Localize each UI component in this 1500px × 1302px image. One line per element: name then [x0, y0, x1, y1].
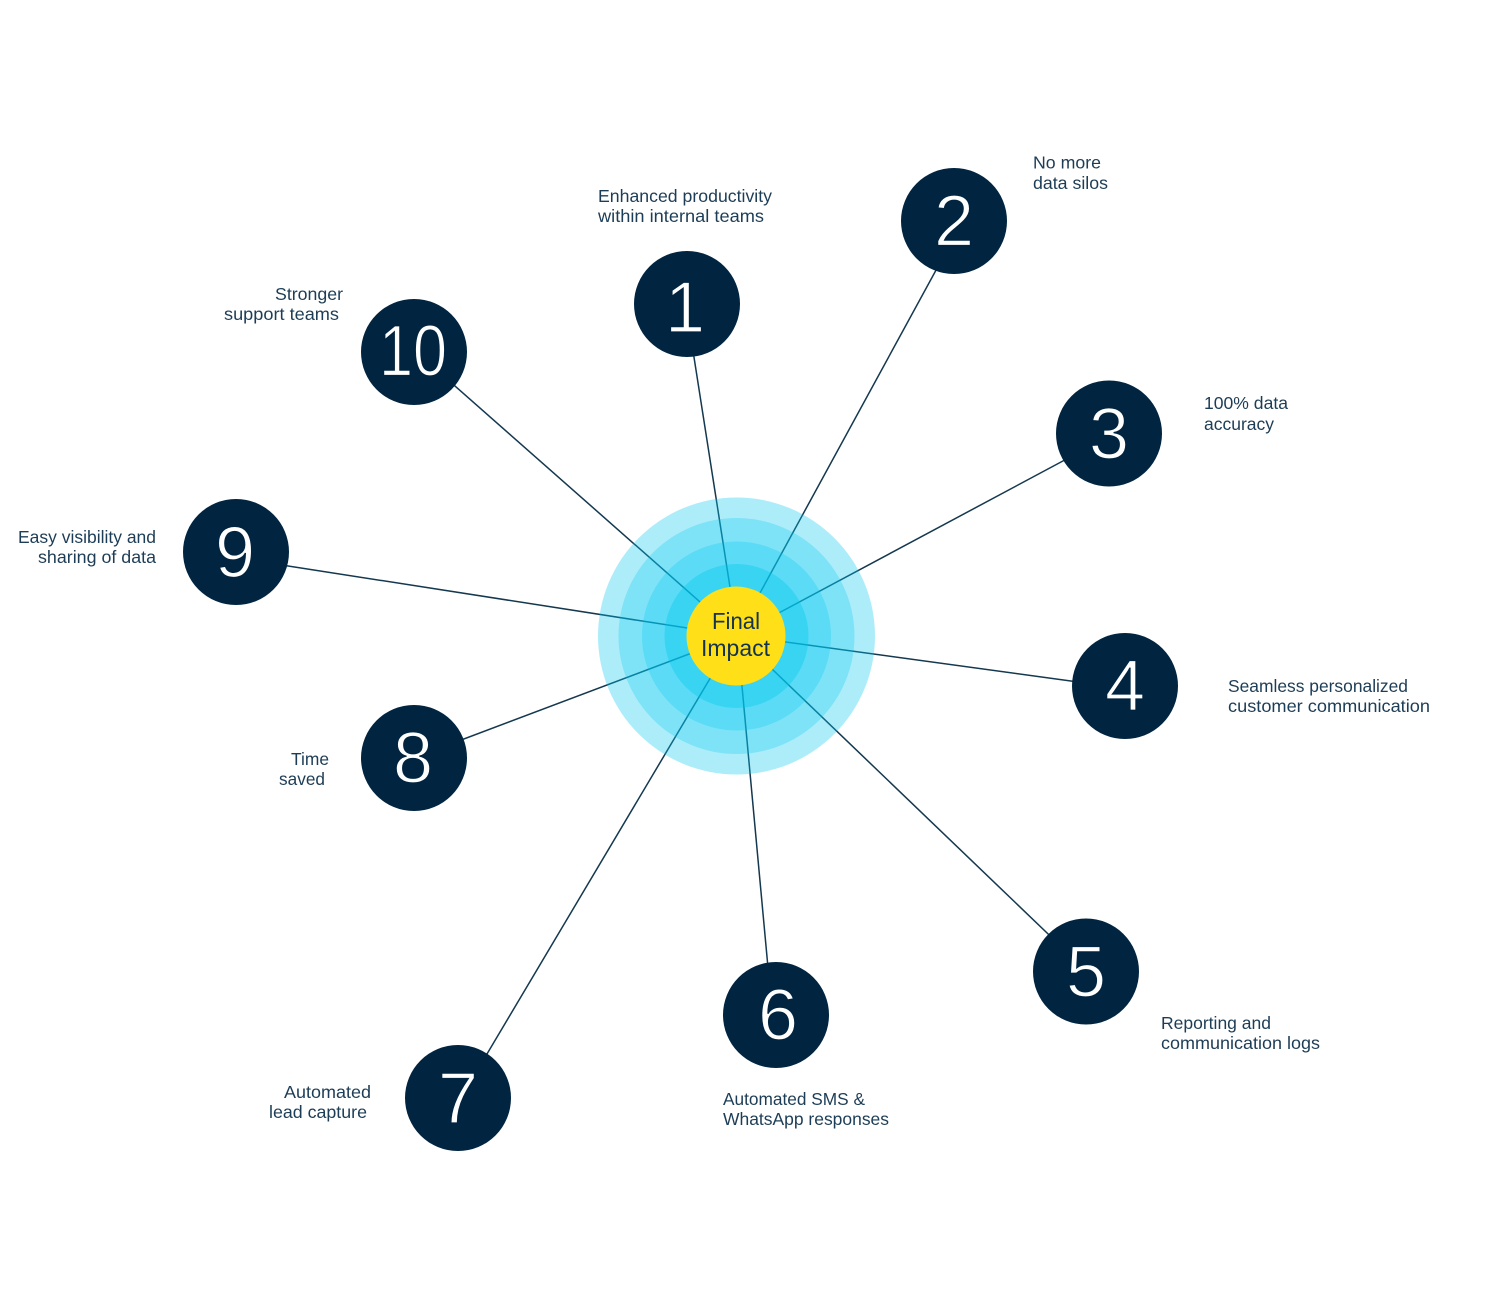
label 10: Stronger	[275, 284, 343, 304]
label 6: WhatsApp responses	[723, 1109, 889, 1129]
label 9	[18, 527, 156, 567]
node 10	[361, 299, 467, 405]
label 3: 100% data	[1204, 393, 1288, 413]
node 3	[1056, 380, 1162, 486]
center circle: Final Impact: Impact	[701, 635, 771, 661]
label 5	[1161, 1013, 1320, 1053]
node 9: 9	[215, 513, 255, 593]
label 3	[1204, 393, 1288, 434]
node 2: 2	[934, 182, 974, 262]
center circle: Final Impact	[686, 586, 786, 686]
node 5: 5	[1066, 932, 1106, 1012]
label 6	[723, 1089, 889, 1129]
node 1: 1	[665, 268, 705, 348]
node 5	[1033, 918, 1139, 1024]
label 2	[1033, 152, 1108, 193]
node 6: 6	[758, 976, 798, 1056]
label 7: lead capture	[269, 1102, 367, 1122]
node 1	[634, 251, 740, 357]
node 9	[183, 499, 289, 605]
label 9: Easy visibility and	[18, 527, 156, 547]
node 6	[723, 962, 829, 1068]
label 5: communication logs	[1161, 1033, 1320, 1053]
label 1: within internal teams	[597, 206, 764, 226]
label 7	[269, 1082, 371, 1122]
label 8: Time	[291, 749, 329, 769]
center circle: Final Impact: Final	[712, 608, 760, 634]
label 7: Automated	[284, 1082, 371, 1102]
node 7	[405, 1045, 511, 1151]
node 8	[361, 705, 467, 811]
label 4	[1228, 676, 1430, 716]
label 1: Enhanced productivity	[598, 186, 772, 206]
label 4: Seamless personalized	[1228, 676, 1408, 696]
node 7: 7	[438, 1059, 478, 1139]
node 8: 8	[393, 718, 433, 798]
node 2	[901, 168, 1007, 274]
label 2: No more	[1033, 152, 1101, 172]
node 10: 10	[379, 312, 447, 392]
label 10: support teams	[224, 304, 339, 324]
connector lines	[260, 250, 1100, 1075]
node 3: 3	[1089, 394, 1129, 474]
label 10	[224, 284, 343, 324]
concentric target rings	[598, 498, 875, 774]
node 4	[1072, 633, 1178, 739]
label 4: customer communication	[1228, 696, 1430, 716]
label 8: saved	[279, 769, 325, 789]
label 9: sharing of data	[38, 547, 156, 567]
node 4: 4	[1105, 646, 1145, 726]
label 6: Automated SMS &	[723, 1089, 865, 1109]
label 3: accuracy	[1204, 414, 1274, 434]
label 5: Reporting and	[1161, 1013, 1271, 1033]
label 1	[597, 186, 772, 226]
label 8	[279, 749, 329, 789]
label 2: data silos	[1033, 173, 1108, 193]
